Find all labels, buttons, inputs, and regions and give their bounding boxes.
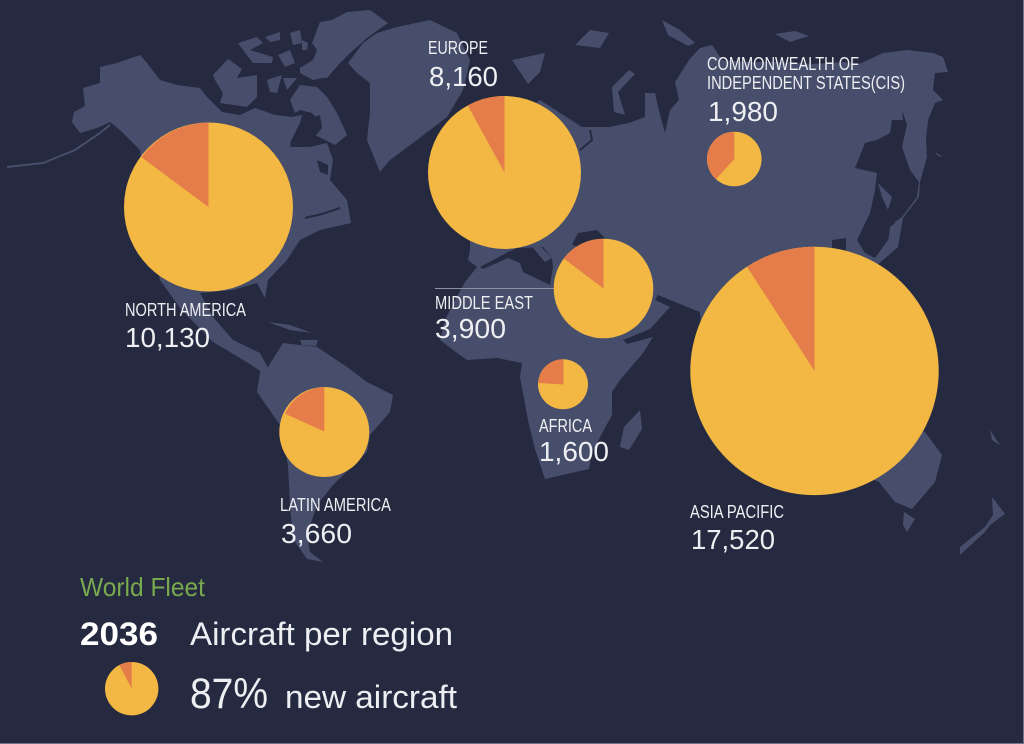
map: North America bbox=[72, 55, 351, 372]
region: Europe bbox=[428, 38, 581, 249]
map: inland seas bbox=[290, 110, 919, 285]
divider line bbox=[435, 288, 555, 289]
legend year: 2036 bbox=[80, 616, 158, 652]
legend percent: 87% bbox=[190, 670, 268, 718]
map: South America bbox=[257, 343, 393, 562]
value: CIS: 1,980 bbox=[708, 96, 778, 127]
label: North America: NORTH AMERICA bbox=[125, 300, 246, 320]
map: Sakhalin and Japan bbox=[533, 183, 902, 263]
world map bbox=[7, 10, 1005, 562]
map: Aleutian chain bbox=[7, 125, 110, 167]
pie: North America bbox=[124, 122, 293, 292]
map: Madagascar bbox=[620, 410, 642, 450]
value: Asia Pacific: 17,520 bbox=[691, 524, 775, 555]
value: Europe: 8,160 bbox=[429, 61, 498, 92]
legend pie icon bbox=[105, 662, 158, 715]
map: Australia bbox=[850, 400, 942, 509]
value: Africa: 1,600 bbox=[539, 436, 609, 467]
region: North America bbox=[124, 122, 293, 353]
map: Tasmania bbox=[903, 512, 915, 532]
region: Commonwealth of Independent States bbox=[707, 54, 905, 186]
pie: Europe bbox=[428, 96, 581, 249]
map: Eurasia and Africa bbox=[440, 45, 948, 479]
value: North America: 10,130 bbox=[125, 322, 210, 353]
label: Asia Pacific: ASIA PACIFIC bbox=[690, 502, 784, 522]
label: CIS bbox=[707, 54, 905, 93]
region: Latin America bbox=[279, 387, 391, 549]
value: Middle East: 3,900 bbox=[435, 313, 506, 344]
map: Caribbean islands bbox=[268, 322, 318, 346]
label: CIS: COMMONWEALTH OF bbox=[707, 54, 859, 74]
legend bbox=[80, 572, 457, 718]
region: Africa bbox=[538, 359, 609, 467]
pie: Asia Pacific bbox=[690, 247, 939, 495]
pie: Middle East bbox=[554, 239, 653, 338]
label: Europe: EUROPE bbox=[428, 38, 488, 58]
map: New Zealand bbox=[960, 497, 1005, 555]
map: Greenland bbox=[348, 20, 470, 172]
map: Ellesmere Island bbox=[300, 10, 388, 78]
map: Baffin Island bbox=[290, 85, 347, 145]
map: Arctic islands bbox=[213, 30, 327, 107]
value: Latin America: 3,660 bbox=[281, 518, 352, 549]
label: Latin America: LATIN AMERICA bbox=[280, 495, 391, 515]
pie: Africa bbox=[538, 359, 588, 409]
region: Asia Pacific bbox=[690, 247, 939, 555]
map: polar and Pacific islands bbox=[512, 20, 1000, 445]
legend title: World Fleet bbox=[80, 572, 206, 602]
region: Middle East bbox=[435, 239, 653, 344]
label: Africa: AFRICA bbox=[539, 416, 592, 436]
label: Middle East: MIDDLE EAST bbox=[435, 293, 533, 313]
label: CIS: INDEPENDENT STATES(CIS) bbox=[707, 73, 905, 93]
legend percent caption: new aircraft bbox=[285, 679, 457, 715]
pie: CIS bbox=[707, 132, 762, 186]
legend subtitle: Aircraft per region bbox=[190, 616, 453, 652]
pie: Latin America bbox=[279, 387, 369, 477]
